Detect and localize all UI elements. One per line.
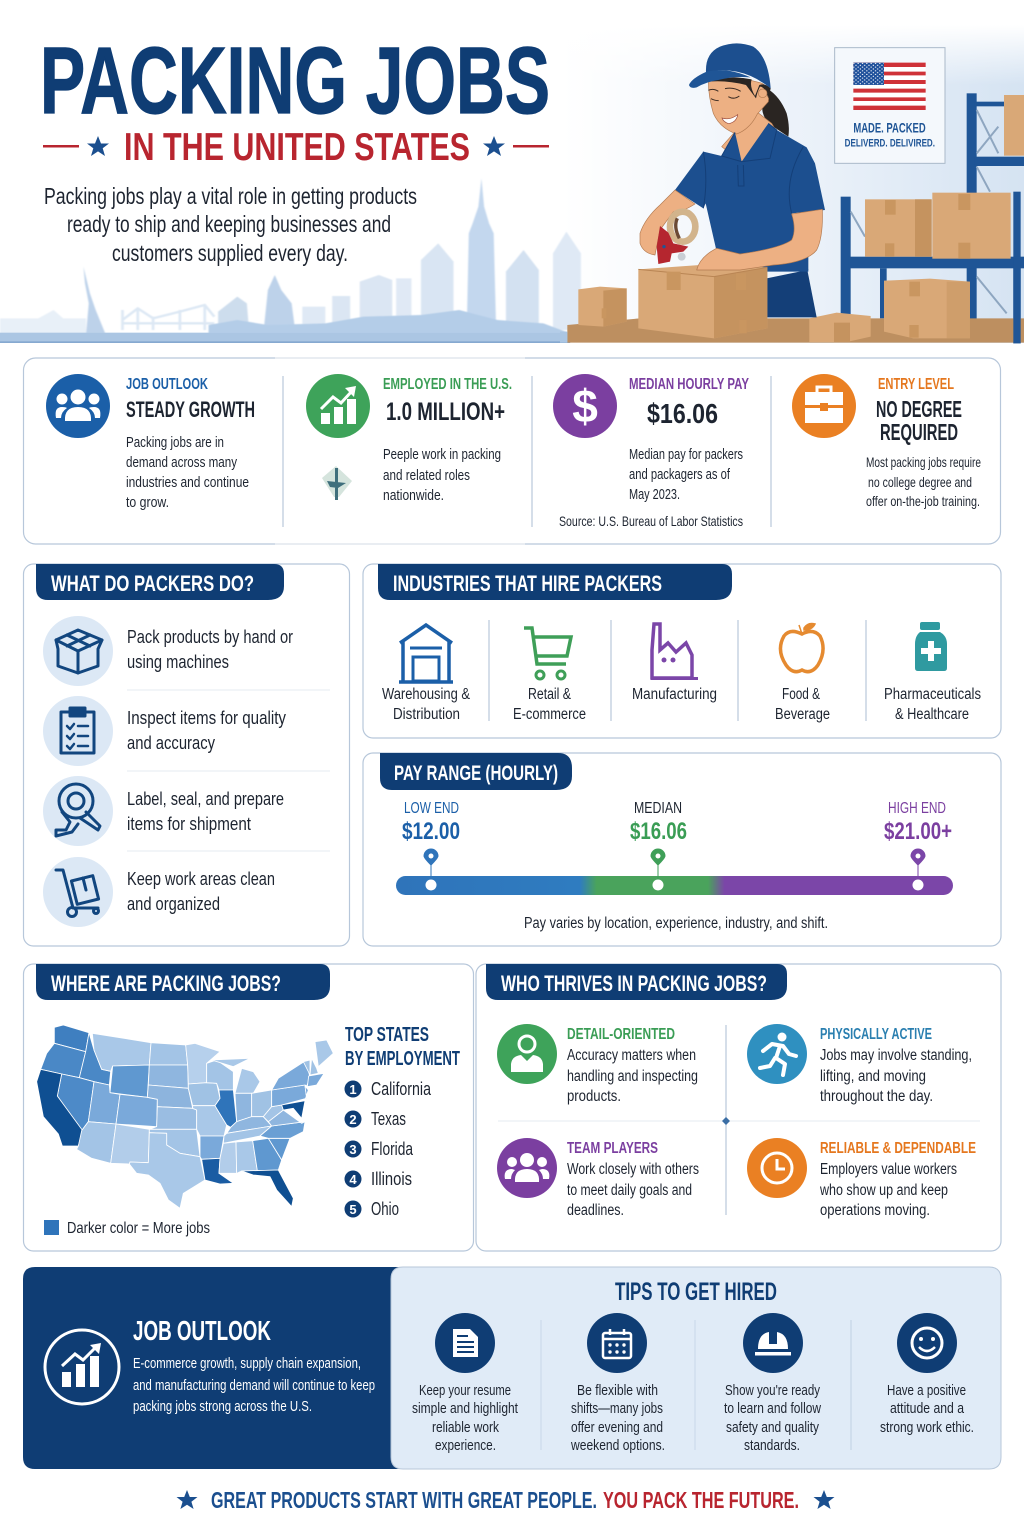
top states list: 2 <box>349 1112 357 1127</box>
tip: attitude: strong work ethic. <box>880 1420 974 1436</box>
industry: warehousing: Distribution <box>393 706 460 723</box>
stat: median hourly pay <box>553 374 749 529</box>
panel: what do packers do <box>24 564 350 946</box>
trait: physically active: lifting, and moving <box>820 1068 926 1085</box>
top states list: TOP STATES <box>345 1024 429 1046</box>
heading: WHERE ARE PACKING JOBS? <box>51 971 281 996</box>
shelves <box>841 93 1024 343</box>
tip: flexible: weekend options. <box>570 1438 665 1454</box>
footer tagline: YOU PACK THE FUTURE. <box>603 1487 799 1513</box>
task: inspect items: and accuracy <box>127 733 215 753</box>
tip: attitude <box>880 1313 974 1436</box>
panel: job outlook banner: JOB OUTLOOK <box>133 1315 271 1346</box>
stat: employed in the u.s.: nationwide. <box>383 487 444 504</box>
intro text: ready to ship and keeping businesses and <box>67 211 391 237</box>
trait: reliable: who show up and keep <box>819 1182 948 1199</box>
task: pack products: Pack products by hand or <box>127 627 293 647</box>
footer tagline: GREAT PRODUCTS START WITH GREAT PEOPLE. <box>211 1487 597 1513</box>
industry: food: Beverage <box>775 706 830 723</box>
neck <box>722 112 777 163</box>
panel: tips to get hired: TIPS TO GET HIRED <box>615 1278 777 1306</box>
panel: who thrives <box>476 964 1001 1251</box>
top states list: Florida <box>371 1139 414 1159</box>
trait: team players: Work closely with others <box>567 1161 699 1178</box>
trait: physically active: throughout the day. <box>820 1088 933 1105</box>
stat: job outlook: STEADY GROWTH <box>126 397 255 422</box>
pay: low end: LOW END <box>404 800 459 817</box>
pay: median: MEDIAN <box>634 800 682 817</box>
trait: detail-oriented: Accuracy matters when <box>567 1047 696 1064</box>
panel: job outlook banner <box>23 1267 400 1469</box>
stat: entry level: REQUIRED <box>880 419 958 445</box>
pay: median: $16.06 <box>630 818 687 845</box>
industry: warehousing <box>382 625 471 723</box>
stat: median hourly pay: May 2023. <box>629 486 680 503</box>
pay: high end: $21.00+ <box>884 818 952 845</box>
us map <box>37 1025 333 1208</box>
top states list: 4 <box>349 1172 357 1187</box>
industry: pharmaceuticals: Pharmaceuticals <box>884 686 981 703</box>
carton on table <box>578 279 970 342</box>
panel: job outlook banner: and manufacturing demand will continue to keep <box>133 1378 375 1394</box>
carton main <box>638 265 767 338</box>
stat: employed in the u.s.: EMPLOYED IN THE U.S. <box>383 376 512 393</box>
stat: entry level: NO DEGREE <box>876 396 962 422</box>
stat: employed in the u.s.: Peeple work in packing <box>383 446 501 463</box>
stat: job outlook: JOB OUTLOOK <box>126 376 208 393</box>
task: label and seal: Label, seal, and prepare <box>127 789 284 809</box>
stat: job outlook: to grow. <box>126 494 169 511</box>
top states list: Ohio <box>371 1199 399 1219</box>
heading: INDUSTRIES THAT HIRE PACKERS <box>393 571 662 596</box>
top states list: California <box>371 1079 432 1099</box>
intro text <box>44 183 417 266</box>
tip: flexible <box>570 1313 665 1454</box>
industry: pharmaceuticals: & Healthcare <box>895 706 969 723</box>
trait: team players: TEAM PLAYERS <box>567 1140 658 1157</box>
industry: retail: E-commerce <box>513 706 586 723</box>
task: inspect items: Inspect items for quality <box>127 708 286 728</box>
stat: job outlook: Packing jobs are in <box>126 434 224 451</box>
stat: median hourly pay: $ <box>572 380 598 432</box>
icon: growth chart <box>45 1330 119 1404</box>
industry: food <box>775 624 830 723</box>
top states list <box>344 1024 460 1219</box>
ponytail <box>762 89 789 137</box>
industry: pharmaceuticals <box>884 622 981 723</box>
panel: key facts <box>24 358 1000 544</box>
heading: PAY RANGE (HOURLY) <box>394 762 558 785</box>
trait: detail-oriented: DETAIL-ORIENTED <box>567 1026 675 1043</box>
panel: industries <box>363 564 1001 738</box>
pay: high end <box>884 800 952 845</box>
stat: entry level: offer on-the-job training. <box>866 493 980 509</box>
stat: median hourly pay: MEDIAN HOURLY PAY <box>629 376 749 393</box>
pay: high end: HIGH END <box>888 800 946 817</box>
stat: entry level: no college degree and <box>868 474 972 490</box>
task: keep clean <box>43 857 275 927</box>
tip: flexible: shifts—many jobs <box>571 1401 663 1417</box>
pay: low end <box>402 800 460 845</box>
top states list: Texas <box>371 1109 406 1129</box>
trait: physically active: Jobs may involve standing, <box>820 1047 972 1064</box>
pay note: Pay varies by location, experience, industry, and shift. <box>524 915 828 932</box>
trait: detail-oriented <box>497 1024 698 1105</box>
table <box>567 318 1024 343</box>
trait: team players <box>497 1138 699 1219</box>
trait: detail-oriented: handling and inspecting <box>567 1068 698 1085</box>
legend: Darker color = More jobs <box>67 1220 210 1237</box>
heading <box>380 753 572 790</box>
trait: reliable: Employers value workers <box>820 1161 957 1178</box>
trait: reliable <box>747 1138 976 1219</box>
head <box>708 77 769 134</box>
stat: entry level <box>792 374 981 509</box>
task: keep clean: and organized <box>127 894 220 914</box>
stat: job outlook: industries and continue <box>126 474 249 491</box>
intro text: customers supplied every day. <box>112 240 348 266</box>
industry: retail <box>513 628 586 723</box>
task: label and seal <box>43 776 284 846</box>
tip: resume: reliable work <box>432 1420 500 1436</box>
stacked cartons <box>865 95 1024 259</box>
industry: manufacturing <box>632 624 717 703</box>
heading <box>486 964 787 1000</box>
panel: job outlook banner: packing jobs strong across the U.S. <box>133 1399 312 1415</box>
top states list: 5 <box>349 1202 357 1217</box>
stat: employed in the u.s. <box>306 374 512 504</box>
illustration: packing worker with shelves <box>560 43 1024 343</box>
trait: reliable: operations moving. <box>820 1202 930 1219</box>
tip: safety: Show you're ready <box>725 1383 821 1399</box>
task: keep clean: Keep work areas clean <box>127 869 275 889</box>
tip: safety: safety and quality <box>726 1420 820 1436</box>
pay range bar <box>396 849 953 895</box>
tip: resume: Keep your resume <box>419 1383 511 1399</box>
tip: safety <box>724 1313 821 1454</box>
wall sign: made and packed: DELIVERD. DELIVIRED. <box>845 138 935 150</box>
heading <box>36 564 284 600</box>
top states list: Illinois <box>371 1169 412 1189</box>
stat: job outlook: demand across many <box>126 454 237 471</box>
tip: resume: simple and highlight <box>412 1401 518 1417</box>
trait: detail-oriented: products. <box>567 1088 621 1105</box>
shirt <box>675 123 825 270</box>
wall sign: made and packed <box>835 48 945 163</box>
trait: physically active: PHYSICALLY ACTIVE <box>820 1026 932 1043</box>
top states list: 3 <box>349 1142 357 1157</box>
tip: flexible: Be flexible with <box>577 1383 658 1399</box>
wall sign: made and packed: MADE. PACKED <box>853 119 926 135</box>
stat: median hourly pay: $16.06 <box>647 398 718 429</box>
industry: warehousing: Warehousing & <box>382 686 471 703</box>
panel: job outlook banner: E-commerce growth, supply chain expansion, <box>133 1356 361 1372</box>
tip: resume <box>412 1313 518 1454</box>
task: label and seal: items for shipment <box>127 814 251 834</box>
top states list: BY EMPLOYMENT <box>345 1048 460 1070</box>
hero background <box>0 25 1024 343</box>
heading: WHO THRIVES IN PACKING JOBS? <box>501 971 767 996</box>
stat: entry level: Most packing jobs require <box>866 454 981 470</box>
stat: entry level: ENTRY LEVEL <box>878 376 954 393</box>
trait: physically active <box>747 1024 972 1105</box>
hair <box>708 78 771 98</box>
panel: tips to get hired <box>391 1267 1001 1469</box>
industry: manufacturing: Manufacturing <box>632 686 717 703</box>
heading <box>36 964 330 1000</box>
tip: attitude: attitude and a <box>890 1401 965 1417</box>
industry: retail: Retail & <box>528 686 572 703</box>
tip: attitude: Have a positive <box>887 1383 966 1399</box>
pay: low end: $12.00 <box>402 818 460 845</box>
stat: median hourly pay: Median pay for packers <box>629 446 743 463</box>
pants <box>767 270 817 317</box>
trait: team players: deadlines. <box>567 1202 624 1219</box>
subtitle: IN THE UNITED STATES <box>124 126 470 169</box>
cap <box>706 43 771 88</box>
intro text: Packing jobs play a vital role in getting products <box>44 183 417 209</box>
industry: food: Food & <box>782 686 820 703</box>
stat: employed in the u.s.: and related roles <box>383 467 470 484</box>
top states list: 1 <box>349 1082 357 1097</box>
stat: employed in the u.s.: 1.0 MILLION+ <box>386 398 505 426</box>
task: pack products: using machines <box>127 652 229 672</box>
heading: WHAT DO PACKERS DO? <box>51 571 254 596</box>
tip: flexible: offer evening and <box>571 1420 663 1436</box>
tip: safety: to learn and follow <box>724 1401 821 1417</box>
tip: resume: experience. <box>435 1438 496 1454</box>
task: pack products <box>43 616 293 686</box>
worker arms and tape dispenser <box>640 190 822 270</box>
heading <box>378 564 732 600</box>
pay: median <box>630 800 687 845</box>
task: inspect items <box>43 696 286 766</box>
trait: team players: to meet daily goals and <box>567 1182 692 1199</box>
panel: where are packing jobs <box>24 964 474 1251</box>
panel: pay range <box>363 753 1001 946</box>
stat: median hourly pay: and packagers as of <box>629 466 731 483</box>
tip: safety: standards. <box>744 1438 800 1454</box>
stat: job outlook <box>46 374 255 511</box>
stat: median hourly pay: Source: U.S. Bureau of Labor Statistics <box>559 513 743 529</box>
skyline illustration <box>0 178 581 343</box>
worker upper body <box>675 43 825 272</box>
title: PACKING JOBS <box>40 28 550 134</box>
